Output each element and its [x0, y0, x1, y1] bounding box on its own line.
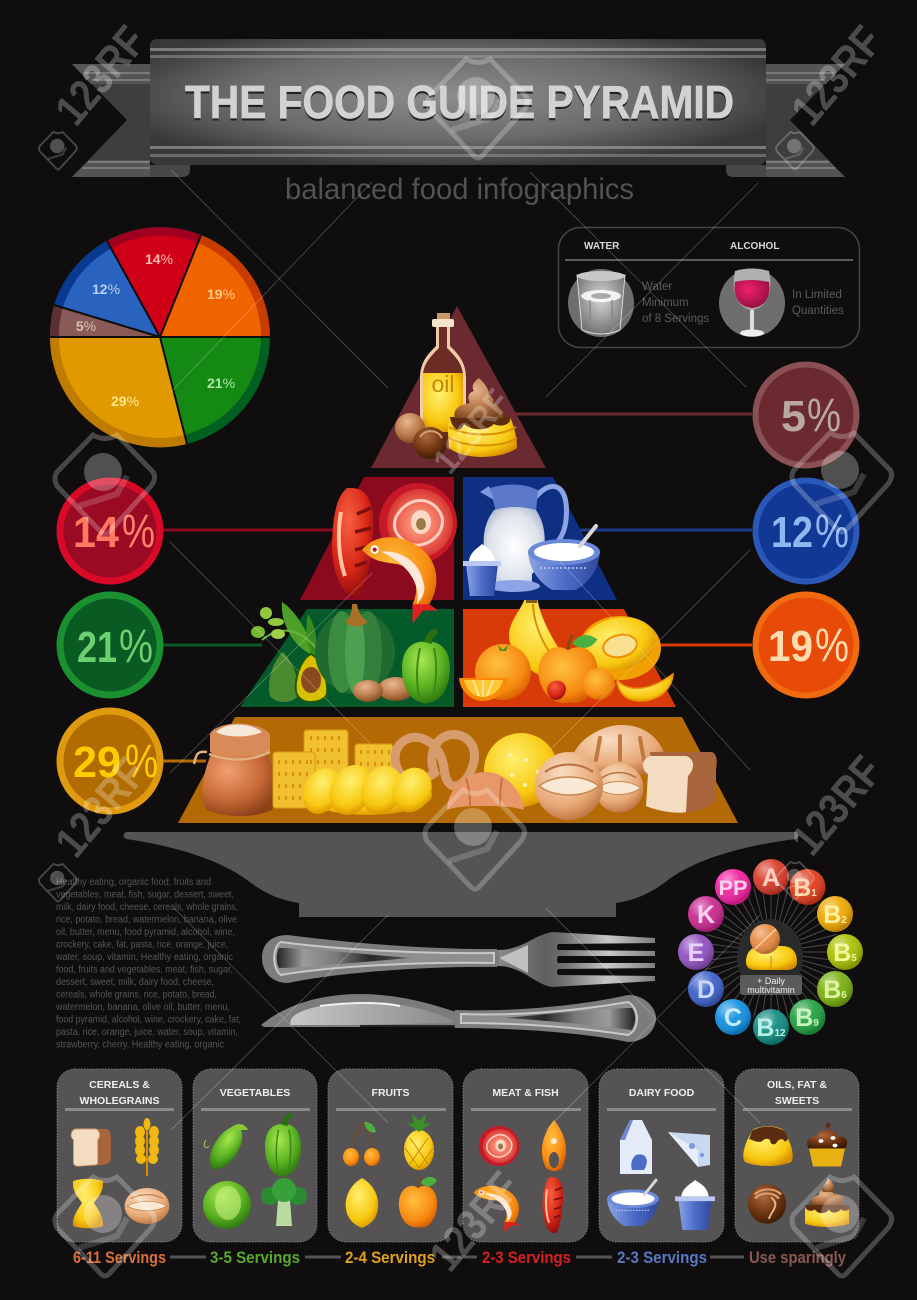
percent badge: 21%: 21	[77, 623, 117, 672]
food pyramid	[178, 306, 738, 823]
percent badge: 29%: %	[125, 734, 158, 787]
percent badge: 12%: %	[815, 504, 849, 557]
percent badge: 14%: %	[122, 504, 155, 557]
rays and central disc	[703, 884, 839, 1020]
vitamin B1: B1	[793, 874, 817, 902]
heading: oils, fat and sweets: OILS, FAT &	[767, 1079, 827, 1091]
percent badge: 29%: 29	[73, 738, 121, 787]
icon: glass of wine	[719, 268, 785, 337]
vitamin A: A	[762, 864, 780, 892]
icon: cherries	[343, 1122, 380, 1166]
vitamin B6: B6	[823, 976, 847, 1004]
text: water servings: of 8 Servings	[642, 313, 709, 325]
text block: keywords: vegetables, meat, fish, sugar, dessert, sweet,	[56, 890, 234, 900]
pyramid tier: cereals	[178, 717, 738, 823]
pie slice: 12% dairy	[54, 241, 160, 337]
text block: keywords: crockery, cake, fat, pasta, rice, orange, juice,	[56, 940, 228, 950]
icon: wheat	[135, 1118, 159, 1176]
vitamin B5: B5	[833, 939, 857, 967]
vitamin B1	[790, 869, 826, 905]
percent badge: 29%	[60, 711, 160, 811]
text block: keywords: dessert, sweet, milk, dairy food, cheese,	[56, 977, 214, 988]
percent badge: 12%: 12	[771, 508, 813, 557]
text block: keywords: food, fruits and vegetables, meat, fish, sugar,	[56, 964, 233, 976]
icon: glass of water	[568, 269, 634, 337]
vitamin B9: B9	[795, 1004, 819, 1032]
watermark: 123RF	[46, 17, 156, 134]
icon: melon slice	[617, 674, 673, 701]
percent badge: 12%	[756, 480, 856, 582]
icon: bread loaf	[570, 725, 668, 775]
vitamin E: E	[688, 939, 704, 967]
pie slice: 21% vegetables: 21%	[207, 375, 235, 391]
label: daily multivitamin: multivitamin	[747, 985, 795, 995]
icon: fish	[474, 1186, 520, 1232]
text: limited quantities: In Limited	[792, 289, 842, 301]
icon: farfalle pasta	[73, 1179, 103, 1228]
percent badge: 21%	[60, 595, 160, 695]
icon: ham	[479, 1126, 519, 1166]
text block: keywords: rice, potato, bread, watermelon, banana, olive	[56, 914, 237, 926]
pyramid tier: oils and sweets	[371, 306, 546, 468]
label: daily multivitamin: + Daily	[757, 976, 785, 986]
pie slice: 12% dairy: 12%	[92, 281, 120, 297]
pie slice: 29% cereals	[50, 337, 187, 447]
icon: yogurt cup	[463, 544, 501, 596]
icon: chocolate cupcake	[807, 1123, 847, 1166]
banner panel	[150, 39, 766, 165]
pie slice: 14% meat	[107, 227, 201, 337]
text block: keywords: pasta, rice, orange, juice, water, soup, vitamin,	[56, 1027, 238, 1038]
vitamin K	[688, 896, 724, 932]
icon: milk jug	[480, 484, 566, 592]
pyramid tier: dairy	[463, 477, 617, 600]
icon: sausage	[542, 1177, 563, 1233]
icon: crackers	[273, 730, 393, 808]
vitamin C	[715, 999, 751, 1035]
pie slice: 14% meat: 14%	[145, 251, 173, 267]
percent badge: 19%: 19	[768, 622, 813, 671]
pie slice: 5% oils	[50, 305, 160, 337]
icon: small orange	[583, 668, 615, 700]
subtitle: balanced food infographics	[285, 173, 634, 206]
icon: bread roll	[125, 1188, 169, 1224]
icon: sliced bread	[643, 752, 717, 813]
vitamin E	[678, 934, 714, 970]
servings: dairy: 2-3 Servings	[617, 1248, 707, 1267]
title: THE FOOD GUIDE PYRAMID	[185, 76, 734, 128]
icon: caramel pudding	[743, 1126, 793, 1166]
icon: bowl of cottage cheese	[607, 1180, 659, 1226]
icon: broccoli	[261, 1178, 307, 1226]
icon: chocolates	[395, 413, 447, 459]
panel: fruits	[328, 1069, 453, 1242]
heading: cereals: WHOLEGRAINS	[80, 1095, 159, 1107]
text block: keywords: cereals, whole grains, rice, potato, bread,	[56, 990, 217, 1000]
pie chart	[50, 227, 270, 447]
plate	[124, 832, 798, 917]
text: limited quantities	[792, 289, 844, 317]
text block: keywords	[55, 877, 241, 1050]
icon: croissant	[447, 772, 524, 810]
icon: whole avocado	[269, 652, 298, 702]
text block: keywords: Healthy eating, organic food, fruits and	[56, 877, 211, 888]
icon: flour sack	[194, 724, 276, 816]
heading: cereals: CEREALS &	[89, 1079, 150, 1091]
icon: apple	[538, 635, 598, 703]
pyramid tier: meat and fish	[300, 477, 457, 623]
icon: orange	[475, 644, 531, 700]
vitamin B2	[817, 896, 853, 932]
icon: oil bottle: oil	[431, 371, 455, 397]
heading: cereals	[80, 1079, 159, 1107]
label: daily multivitamin	[740, 975, 802, 995]
watermark: 123RF	[782, 17, 892, 134]
pie slice: 19% fruits: 19%	[207, 286, 235, 302]
icon: leafy herbs	[251, 602, 318, 662]
icon: layered dessert	[805, 1178, 849, 1227]
vitamin B12	[753, 1009, 789, 1045]
watermark: 123RF	[782, 747, 892, 864]
vitamin B12: B12	[756, 1014, 786, 1042]
vitamin PP	[715, 869, 751, 905]
panel: vegetables	[193, 1069, 317, 1242]
title: THE FOOD GUIDE PYRAMID	[185, 78, 734, 130]
servings: cereals: 6-11 Servings	[73, 1248, 166, 1267]
panel: cereals and wholegrains	[57, 1069, 182, 1242]
percent badge: 14%: 14	[73, 508, 119, 557]
pie slice: 29% cereals: 29%	[111, 393, 139, 409]
vitamin B6	[817, 971, 853, 1007]
text block: keywords: water, soup, vitamin, Healthy eating, organic	[55, 952, 233, 963]
vitamin PP: PP	[718, 877, 748, 900]
panel: meat and fish	[463, 1069, 588, 1242]
watermark: 123RF	[420, 1163, 530, 1280]
icon: ham steak	[379, 483, 457, 563]
panel: dairy food	[599, 1069, 724, 1242]
heading: dairy food: DAIRY FOOD	[629, 1087, 695, 1099]
vitamin wheel	[678, 859, 863, 1045]
icon: salmon steak	[542, 1120, 566, 1171]
ribbon tail: right	[726, 64, 845, 177]
icon: yogurt	[675, 1180, 715, 1230]
percent badge: 5%: %	[807, 388, 841, 441]
icon: avocado half	[296, 654, 327, 702]
percent badge: 19%: %	[815, 618, 849, 671]
icon: plaited challah bread	[296, 758, 439, 822]
icon: orange slice	[459, 678, 508, 701]
heading: meat and fish: MEAT & FISH	[492, 1087, 559, 1099]
icon: chocolate truffle	[748, 1184, 786, 1224]
heading: oils, fat and sweets	[767, 1079, 827, 1107]
pie slice: 19% fruits	[160, 235, 270, 337]
icon: milk carton	[620, 1120, 652, 1174]
vitamin K: K	[697, 901, 715, 929]
icon: sausage	[332, 488, 373, 596]
icon: oil bottle	[420, 313, 466, 432]
vitamin D: D	[697, 976, 715, 1004]
servings: meat: 2-3 Servings	[482, 1248, 571, 1267]
icon: pineapple	[404, 1114, 434, 1170]
text: water servings: Water	[642, 281, 672, 293]
heading: oils, fat and sweets: SWEETS	[775, 1095, 819, 1107]
icon: potatoes	[353, 677, 414, 702]
servings: vegetables: 3-5 Servings	[210, 1248, 300, 1267]
icon: bread rolls	[535, 752, 643, 820]
title banner	[72, 39, 845, 177]
text: water servings: Minimum	[642, 297, 689, 309]
pyramid tier: fruits	[459, 595, 676, 707]
connector lines	[163, 414, 752, 761]
panel: oils, fat and sweets	[735, 1069, 859, 1242]
icon: vitamin pills	[746, 924, 797, 970]
icon: layered dessert	[447, 378, 517, 457]
icon: blue cheese	[668, 1132, 710, 1167]
servings: sweets: Use sparingly	[749, 1248, 846, 1267]
icon: cabbage	[203, 1181, 251, 1229]
vitamin C: C	[724, 1004, 742, 1032]
vitamin B9	[790, 999, 826, 1035]
text block: keywords: strawberry, cherry, Healthy eating, organic	[56, 1040, 224, 1050]
text: limited quantities: Quantities	[792, 305, 844, 317]
vitamin A	[753, 859, 789, 895]
icon: round bun	[484, 733, 558, 807]
icon: lemon	[346, 1178, 378, 1228]
icon: green pepper	[402, 628, 450, 704]
percent badge: 5%: 5	[781, 392, 806, 441]
icon: bowl of cottage cheese	[528, 526, 600, 590]
heading: water: WATER	[584, 241, 620, 252]
heading: fruits: FRUITS	[372, 1087, 409, 1099]
text block: keywords: watermelon, banana, olive oil, butter, menu,	[55, 1002, 230, 1013]
icon: strawberry	[547, 680, 566, 700]
vitamin B5	[827, 934, 863, 970]
percent badge: 19%	[756, 594, 856, 696]
icon: bread	[71, 1129, 111, 1166]
icon: fish	[362, 537, 438, 623]
text block: keywords: food pyramid, alcohol, wine, crockery, cake, fat,	[56, 1014, 241, 1026]
icon: bananas	[509, 595, 578, 681]
pie slice: 5% oils: 5%	[76, 318, 96, 334]
icon: pumpkin	[315, 604, 395, 694]
ribbon tail: left	[72, 64, 190, 177]
icon: cucumber	[203, 1121, 249, 1175]
text block: keywords: milk, dairy food, cheese, cereals, whole grains,	[56, 902, 238, 913]
text block: keywords: oil, butter, menu, food pyramid, alcohol, wine,	[56, 927, 235, 938]
icon: pepper	[265, 1113, 301, 1177]
panel: water and alcohol	[558, 228, 860, 348]
servings: fruits: 2-4 Servings	[345, 1248, 435, 1267]
icon: melon	[575, 611, 661, 680]
percent badge: 21%: %	[119, 619, 153, 672]
icon: pretzel	[395, 734, 475, 786]
text: water servings	[642, 281, 709, 325]
percent badge: 5%	[756, 364, 856, 466]
fork	[262, 932, 655, 987]
heading: vegetables: VEGETABLES	[220, 1087, 290, 1099]
vitamin D	[688, 971, 724, 1007]
heading: alcohol: ALCOHOL	[730, 241, 779, 252]
pyramid tier: vegetables	[240, 602, 454, 707]
watermark: 123RF	[425, 381, 518, 481]
percent badge: 14%	[60, 481, 160, 581]
icon: apple	[399, 1177, 437, 1227]
pie slice: 21% vegetables	[160, 337, 270, 444]
serving labels	[73, 1248, 846, 1267]
watermark: 123RF	[46, 749, 156, 866]
vitamin B2: B2	[823, 901, 847, 929]
knife	[261, 994, 656, 1042]
